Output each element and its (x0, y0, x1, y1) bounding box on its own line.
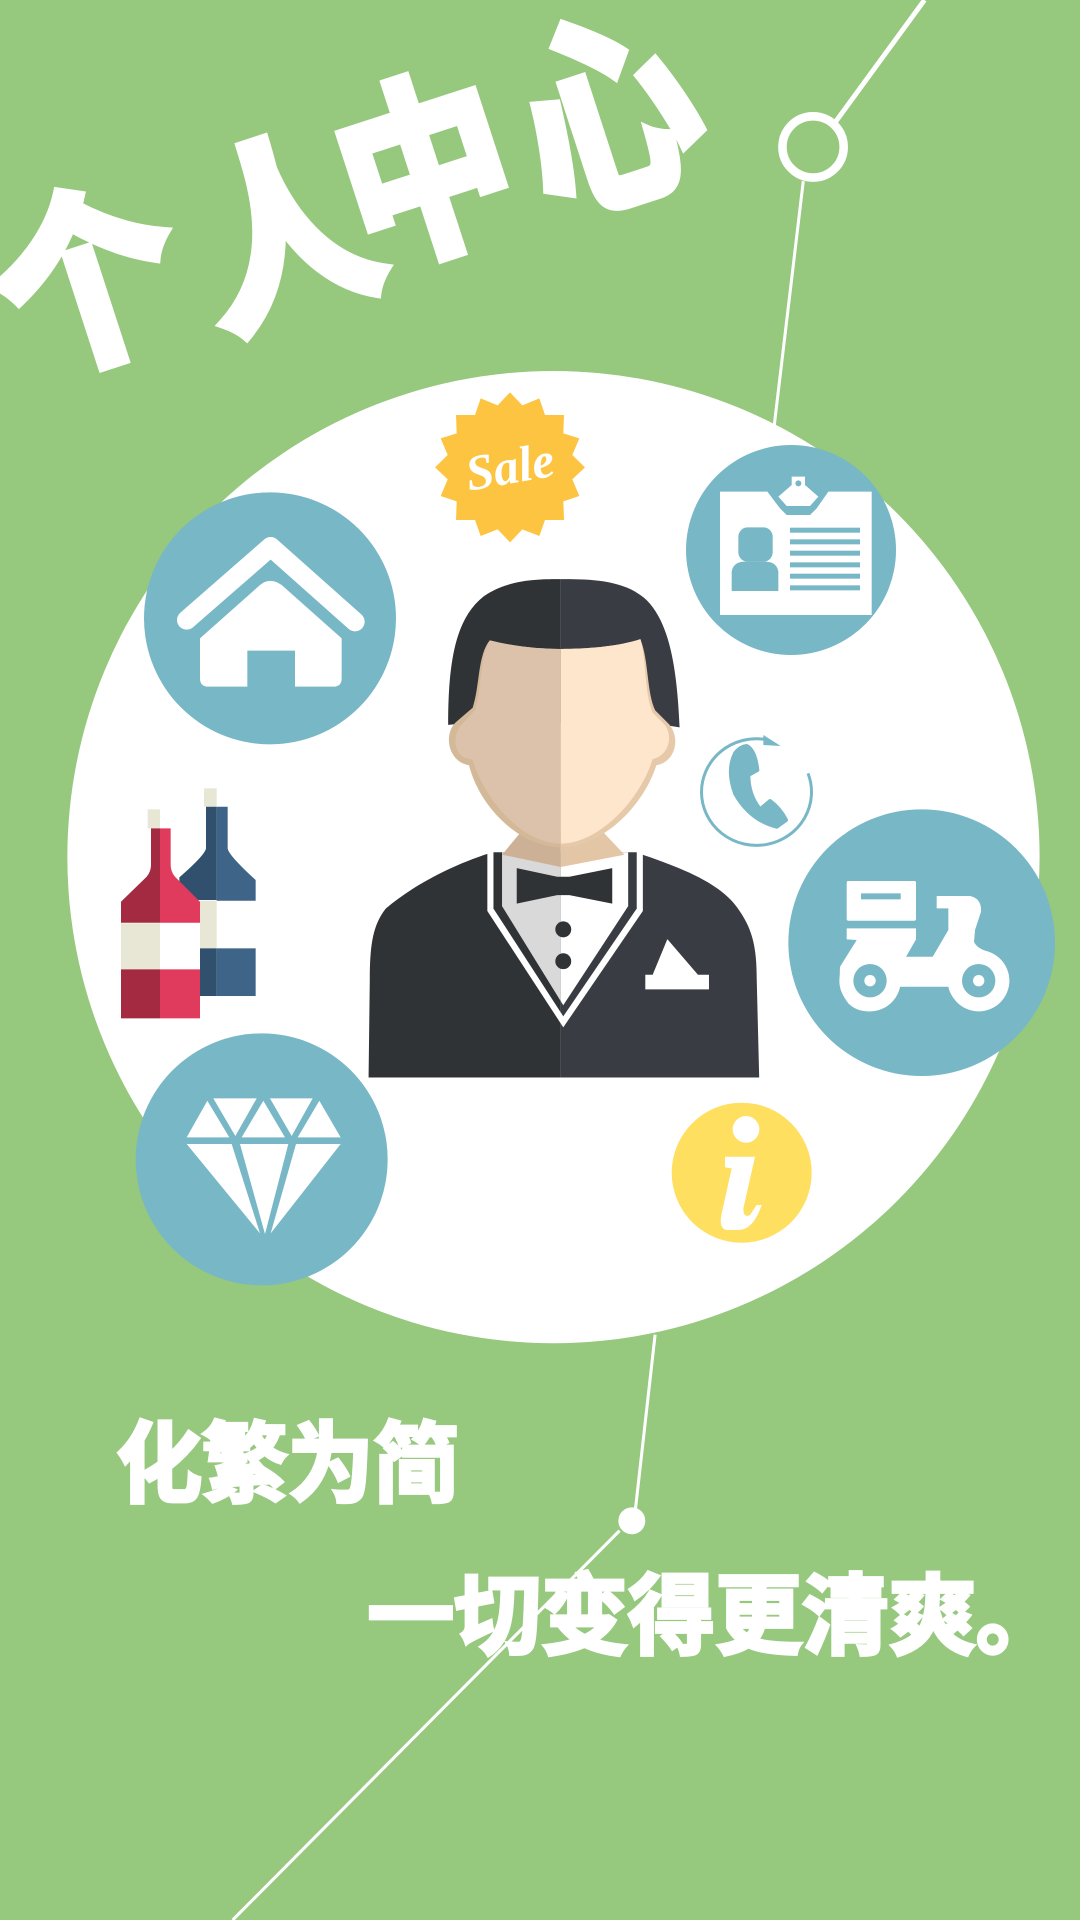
large white circle (67, 371, 1040, 1343)
face (449, 639, 675, 847)
icon: home (144, 492, 396, 744)
icon: diamond (136, 1033, 388, 1285)
icon: id badge (686, 445, 896, 655)
icon: info (672, 1103, 812, 1243)
subheading: everything fresh: 一切变得更清爽。 (367, 1567, 1063, 1666)
bow tie (517, 868, 612, 904)
icon: sale badge (435, 392, 585, 542)
icon: sale badge: Sale (461, 431, 558, 502)
title: 人 (165, 104, 403, 367)
connector line with ring node (774, 0, 924, 429)
title (0, 0, 729, 414)
neck (502, 833, 624, 867)
icon: wine bottles (121, 788, 256, 1018)
subheading: simplify: 化繁为简 (116, 1415, 459, 1514)
icon: scooter (788, 809, 1055, 1076)
title: 中 (312, 44, 540, 304)
icon: phone (702, 735, 812, 845)
central man in tuxedo (369, 579, 759, 1078)
connector line with dot node (233, 1335, 655, 1920)
hair (448, 579, 680, 727)
suit (369, 852, 759, 1078)
